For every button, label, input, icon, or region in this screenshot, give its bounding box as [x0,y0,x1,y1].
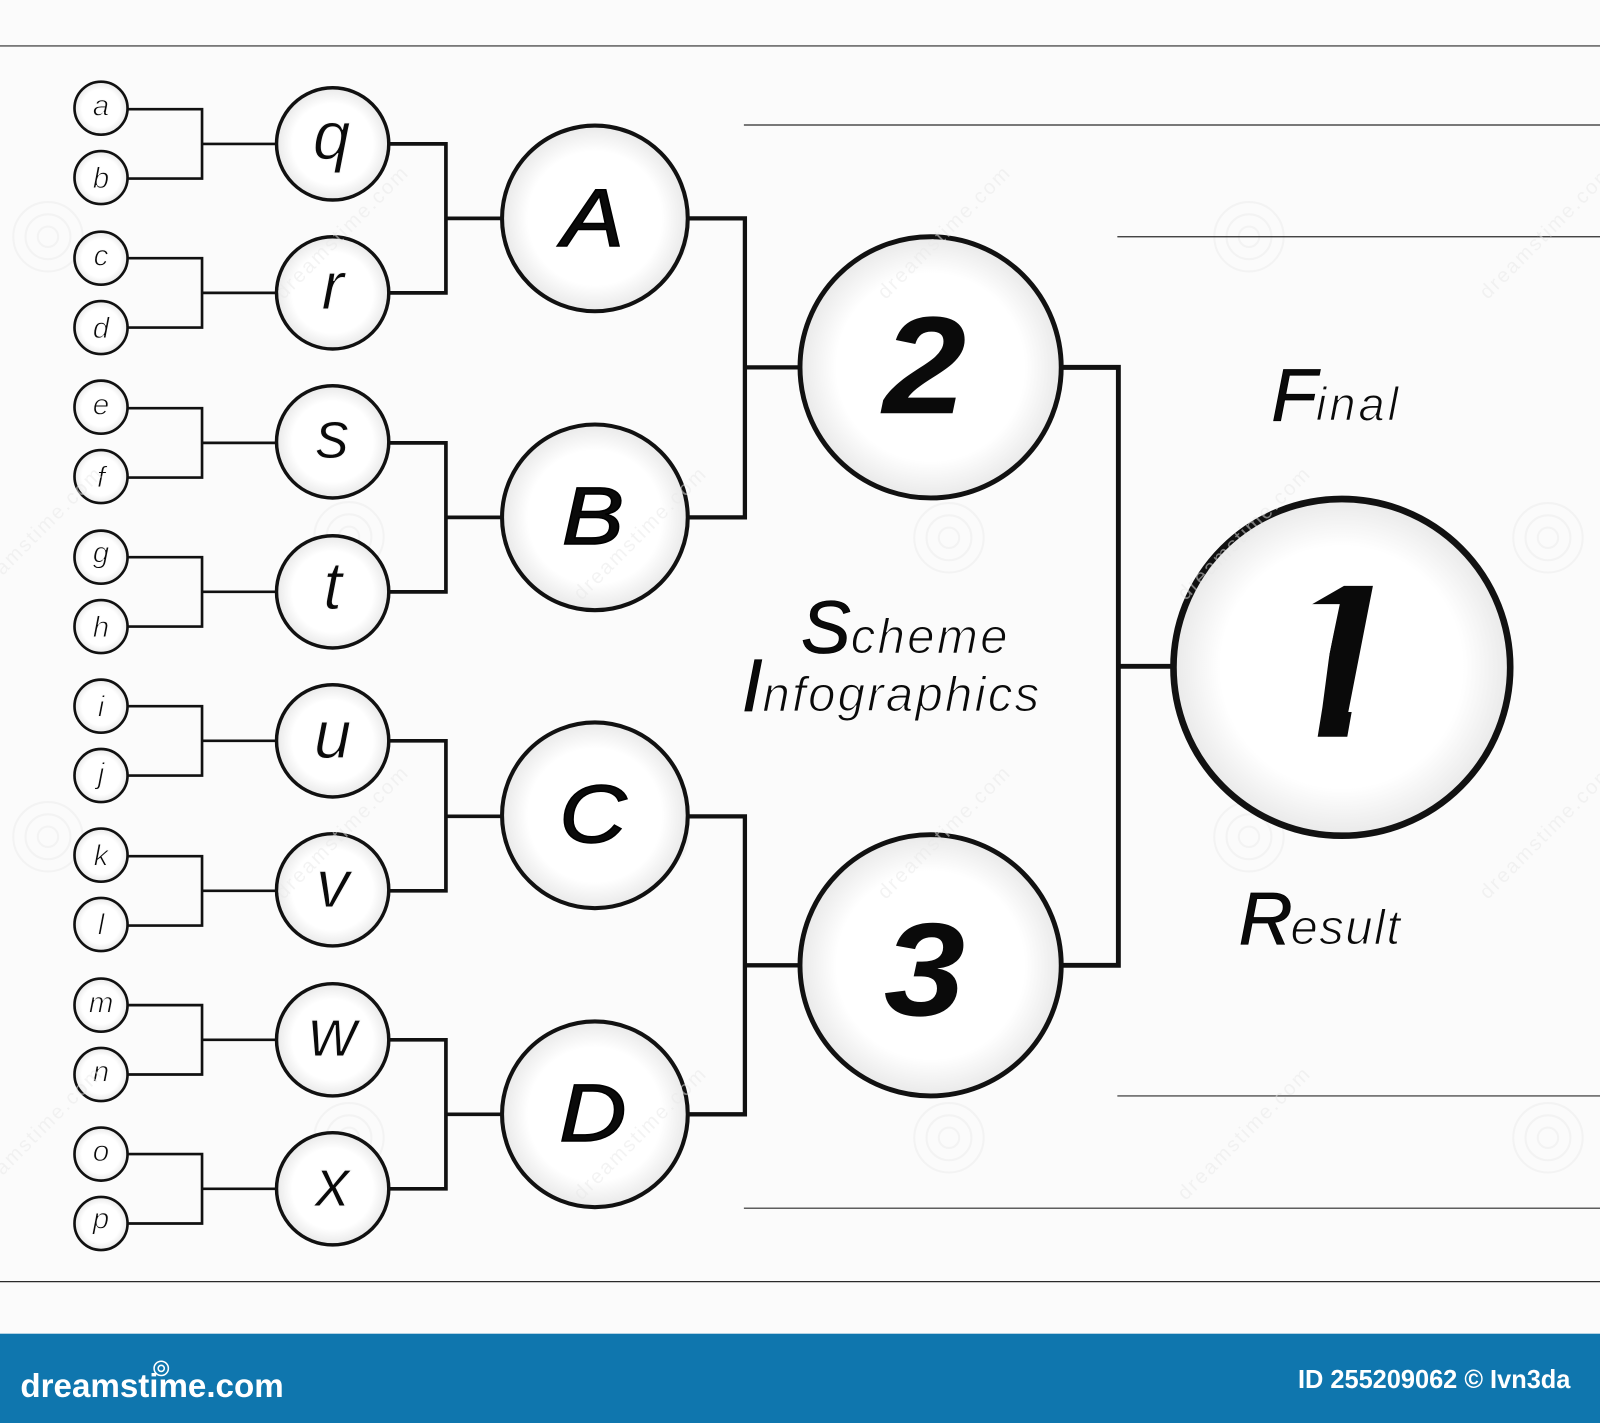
semifinal bracket [1062,367,1171,965]
node: C [502,722,688,908]
title: Final: Final [1271,353,1401,436]
node: i [74,680,128,733]
node: 2: 2 [880,287,966,443]
node: l: l [98,909,106,942]
node: c: c [94,239,109,272]
node: b [74,151,128,204]
node: u [277,685,389,797]
node: 2 [800,237,1061,498]
scheme infographic canvas: dreamstime.com [874,761,1016,904]
node: a [74,82,128,135]
node: v [277,834,389,946]
node: b: b [93,162,109,195]
node: 1: 1 [1273,539,1395,784]
icon: spiral logo mark [154,1361,168,1376]
node: h [74,600,128,653]
node: B: B [562,470,624,562]
title: Scheme Infographics: Infographics [742,644,1042,727]
node: B [502,425,688,610]
node: v: v [316,847,353,922]
bracket connectors [128,109,1171,1223]
node: 1 [1173,499,1510,836]
node: e [74,381,128,434]
node: e: e [93,388,109,421]
node: g: g [93,536,110,569]
node: t [277,536,389,648]
scheme infographic canvas: dreamstime.com [272,761,414,904]
scheme infographic canvas: dreamstime.com [569,1062,712,1205]
title: Result: Result [1239,877,1402,960]
scheme infographic canvas: dreamstime.com [1174,1062,1316,1205]
image id and credit: ID 255209062 © Ivn3da [1298,1366,1571,1394]
node: x: x [313,1146,352,1221]
node: d [74,301,128,354]
node: C: C [559,768,627,860]
node: r: r [321,249,346,324]
node: j [74,749,128,802]
node: 3 [800,835,1061,1096]
node: p [74,1197,128,1250]
node: n: n [93,1056,109,1089]
title: Scheme Infographics [742,586,1042,727]
node: q: q [313,99,350,174]
node: 3: 3 [884,895,965,1044]
node: u: u [314,698,351,773]
node: h: h [93,611,109,644]
scheme infographic canvas: dreamstime.com [272,161,414,304]
node: t: t [323,549,345,624]
node: k: k [94,839,111,872]
node: A: A [557,172,624,264]
node: D: D [559,1067,626,1159]
first round brackets [128,109,277,1223]
node: g [74,531,128,584]
scheme infographic canvas: dreamstime.com [874,161,1016,304]
node: c [74,232,128,285]
node: k [74,829,128,882]
node: x [277,1133,389,1245]
node: f: f [97,461,108,494]
node: f [74,450,128,503]
brand logo text: dreamstime.com [20,1368,284,1405]
node: l [74,898,128,951]
node: s [277,386,389,498]
title: Scheme Infographics: Scheme [801,586,1010,669]
node: p: p [92,1203,109,1236]
scheme infographic canvas: dreamstime.com [1174,462,1316,605]
node: o: o [93,1135,109,1168]
scheme infographic canvas: dreamstime.com [569,462,712,605]
node: i: i [98,690,106,723]
node: s: s [316,398,349,473]
node: j: j [94,758,106,791]
node: A [502,126,688,311]
node: a: a [93,89,109,122]
node: w: w [308,996,361,1071]
node: d: d [93,312,111,345]
node: q [277,88,389,200]
node: m: m [89,986,113,1019]
third round brackets [689,218,799,1114]
node: n [74,1048,128,1101]
second round brackets [389,144,501,1189]
node: w [277,984,389,1096]
node: o [74,1128,128,1181]
node: D [502,1021,688,1207]
footer banner [0,1334,1600,1423]
node: m [74,979,128,1032]
node: r [277,237,389,349]
